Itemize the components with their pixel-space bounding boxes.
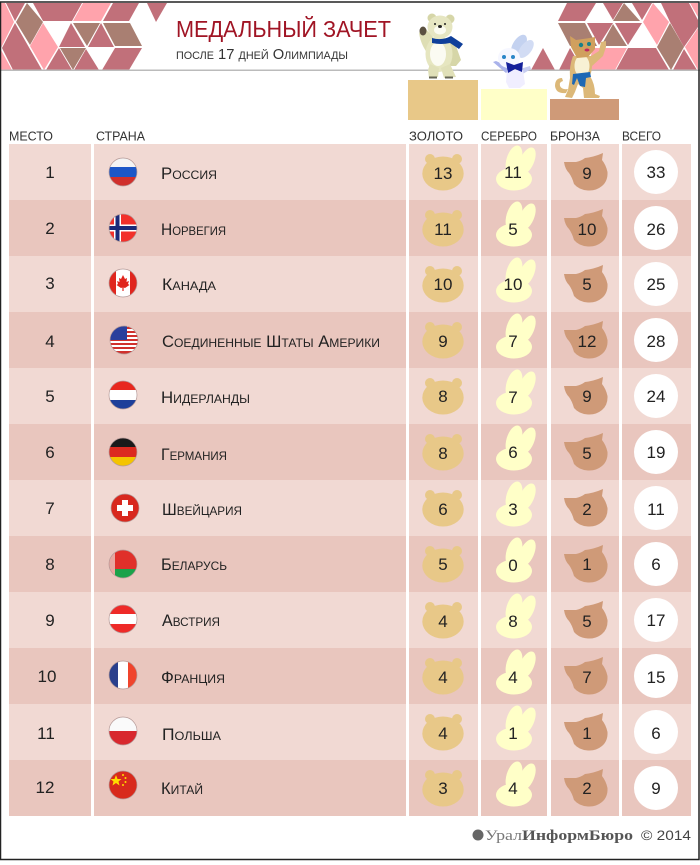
silver count: 11 (504, 163, 522, 182)
gold count: 4 (438, 668, 448, 687)
total count (634, 318, 678, 362)
gold count: 9 (438, 332, 448, 351)
rank: 6 (45, 443, 55, 462)
bronze count (564, 601, 608, 639)
gold count (422, 378, 464, 414)
flag: Canada (109, 269, 137, 297)
table row 10: France (9, 647, 691, 704)
silver count: 8 (508, 612, 518, 631)
country name: Беларусь (161, 556, 227, 574)
rank: 1 (45, 163, 55, 182)
total count (634, 206, 678, 250)
footer logo and copyright: Урал (485, 828, 523, 844)
silver count (496, 143, 539, 190)
table row 4: USA (9, 311, 691, 368)
rank: 2 (45, 219, 55, 238)
country name: Китай (161, 780, 203, 798)
rank: 5 (45, 387, 55, 406)
gold count (422, 266, 464, 302)
table row 1: Russia (9, 143, 691, 200)
bronze count (564, 769, 608, 807)
flag: Belarus (109, 550, 137, 578)
table row 8: Belarus (9, 535, 691, 592)
rank: 4 (45, 332, 55, 351)
total count: 6 (651, 555, 661, 574)
gold count (422, 658, 464, 694)
header rule (0, 70, 700, 71)
silver count: 7 (508, 388, 518, 407)
table row 2: Norway (9, 199, 691, 256)
gold count (422, 546, 464, 582)
gold count: 5 (438, 555, 448, 574)
total count: 9 (651, 779, 661, 798)
country name: Франция (161, 669, 225, 687)
silver count: 3 (508, 500, 518, 519)
mascot: polar bear (419, 14, 463, 78)
mascot: leopard (555, 36, 606, 98)
bronze count (564, 657, 608, 695)
rank: 10 (38, 667, 56, 686)
silver count: 0 (508, 556, 518, 575)
bronze count: 7 (582, 668, 592, 687)
footer logo and copyright: ИнформБюро (522, 828, 633, 844)
total count: 15 (647, 668, 665, 687)
silver count: 5 (508, 220, 518, 239)
podium: silver (481, 89, 547, 120)
gold count (422, 154, 464, 190)
flag: France (109, 661, 137, 689)
total count (634, 430, 678, 474)
total count: 26 (647, 220, 665, 239)
bronze count (564, 265, 608, 303)
silver count (496, 199, 539, 246)
silver count (496, 591, 539, 638)
gold count (422, 322, 464, 358)
gold count (422, 714, 464, 750)
total count (634, 766, 678, 810)
flag: Switzerland (111, 494, 139, 522)
country name: Германия (161, 446, 227, 464)
bronze count: 1 (582, 555, 592, 574)
bronze count: 5 (582, 444, 592, 463)
podium: gold (408, 80, 478, 120)
flag: Russia (109, 158, 137, 186)
bronze count: 2 (582, 500, 592, 519)
table row 5: Netherlands (9, 367, 691, 424)
rank: 8 (45, 555, 55, 574)
total count: 6 (651, 724, 661, 743)
gold count: 13 (434, 164, 452, 183)
flag: Norway (109, 214, 137, 242)
table row 11: Poland (9, 703, 691, 760)
total count: 17 (647, 611, 665, 630)
gold count: 4 (438, 612, 448, 631)
bronze count: 5 (582, 275, 592, 294)
silver count: 7 (508, 332, 518, 351)
bronze count (564, 713, 608, 751)
country name: Соединенные Штаты Америки (162, 333, 380, 351)
total count (634, 710, 678, 754)
total count (634, 262, 678, 306)
column headers (9, 130, 661, 144)
bronze count (564, 377, 608, 415)
bronze count: 12 (578, 332, 596, 351)
rank: 7 (45, 499, 55, 518)
gold count (422, 210, 464, 246)
country name: Швейцария (162, 501, 242, 519)
bronze count (564, 489, 608, 527)
header pattern left (1, 3, 167, 70)
total count (634, 486, 678, 530)
gold count (422, 602, 464, 638)
header: gold: ЗОЛОТО (409, 130, 463, 144)
silver count (496, 255, 539, 302)
gold count: 10 (434, 275, 452, 294)
total count: 11 (647, 500, 665, 519)
rank: 3 (45, 274, 55, 293)
bronze count: 1 (582, 724, 592, 743)
header: place: МЕСТО (9, 130, 53, 144)
table row 6: Germany (9, 423, 691, 480)
silver count (496, 367, 539, 414)
subtitle: после 17 дней Олимпиады (176, 46, 348, 63)
footer logo and copyright (472, 828, 692, 844)
rank: 9 (45, 611, 55, 630)
header: silver: СЕРЕБРО (481, 130, 537, 144)
bronze count (564, 545, 608, 583)
podium: bronze (550, 99, 619, 120)
silver count: 10 (504, 275, 522, 294)
bronze count: 9 (582, 387, 592, 406)
title: МЕДАЛЬНЫЙ ЗАЧЕТ (176, 15, 391, 42)
bronze count (564, 153, 608, 191)
bronze count: 10 (578, 220, 596, 239)
silver count: 6 (508, 443, 518, 462)
gold count: 8 (438, 387, 448, 406)
flag: China (109, 771, 137, 799)
bronze count: 5 (582, 612, 592, 631)
total count (634, 150, 678, 194)
header: bronze: БРОНЗА (550, 130, 601, 144)
country name: Польша (162, 726, 221, 744)
country name: Канада (162, 276, 216, 294)
rank: 11 (37, 724, 55, 743)
header: country: СТРАНА (96, 130, 146, 144)
silver count: 4 (508, 668, 518, 687)
silver count: 4 (508, 779, 518, 798)
bronze count: 2 (582, 779, 592, 798)
flag: USA (110, 326, 138, 354)
silver count: 1 (508, 724, 518, 743)
country name: Нидерланды (161, 389, 250, 407)
gold count: 3 (438, 779, 448, 798)
silver count (496, 479, 539, 526)
header: total: ВСЕГО (622, 130, 661, 144)
silver count (496, 647, 539, 694)
total count: 33 (647, 163, 665, 182)
header pattern right (531, 3, 698, 70)
total count (634, 374, 678, 418)
flag: Austria (109, 605, 137, 633)
silver count (496, 759, 539, 806)
table row 12: China (9, 759, 691, 816)
total count (634, 542, 678, 586)
country name: Норвегия (161, 221, 226, 239)
gold count (422, 490, 464, 526)
gold count (422, 434, 464, 470)
footer logo and copyright: © 2014 (641, 828, 692, 843)
gold count: 6 (438, 500, 448, 519)
gold count: 8 (438, 444, 448, 463)
gold count (422, 770, 464, 806)
flag: Germany (109, 438, 137, 466)
bronze count (564, 433, 608, 471)
country name: Австрия (162, 612, 220, 630)
bronze count: 9 (582, 164, 592, 183)
table row 7: Switzerland (9, 479, 691, 536)
flag: Netherlands (109, 381, 137, 409)
total count: 25 (647, 275, 665, 294)
total count: 19 (647, 443, 665, 462)
silver count (496, 703, 539, 750)
gold count: 4 (438, 724, 448, 743)
silver count (496, 535, 539, 582)
gold count: 11 (434, 220, 452, 239)
table row 9: Austria (9, 591, 691, 648)
silver count (496, 423, 539, 470)
silver count (496, 311, 539, 358)
total count: 24 (647, 387, 665, 406)
flag: Poland (109, 717, 137, 745)
total count (634, 598, 678, 642)
rank: 12 (36, 778, 54, 797)
total count (634, 654, 678, 698)
country name: Россия (161, 165, 217, 183)
total count: 28 (647, 332, 665, 351)
bronze count (564, 209, 608, 247)
table row 3: Canada (9, 255, 691, 312)
bronze count (564, 321, 608, 359)
mascot: hare (493, 32, 537, 88)
